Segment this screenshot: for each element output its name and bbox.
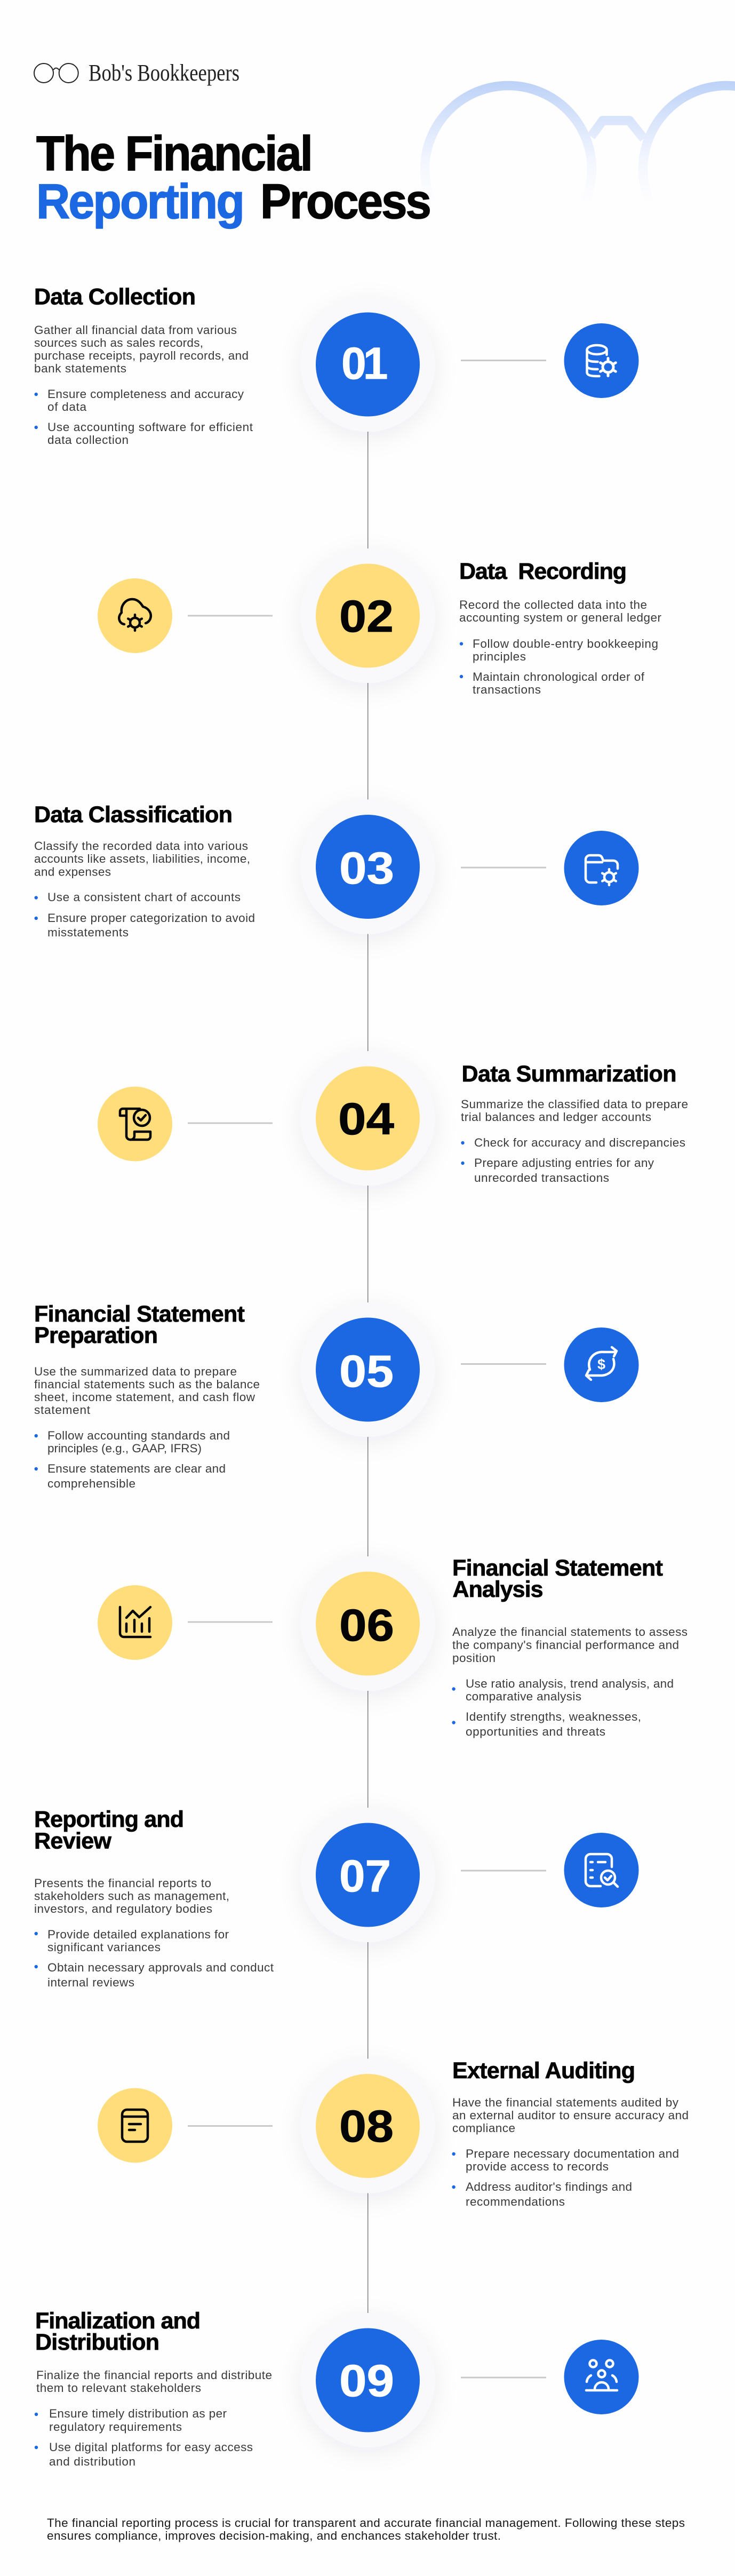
step number badge 04: 04 bbox=[338, 1094, 394, 1144]
heading: Financial Statement bbox=[34, 1301, 245, 1327]
conclusion text bbox=[47, 2516, 685, 2542]
icon: cloud gear bbox=[98, 578, 172, 653]
bullet list bbox=[35, 2407, 253, 2468]
heading: Analysis bbox=[452, 1577, 543, 1602]
description bbox=[36, 2368, 272, 2395]
connector to icon bbox=[188, 1123, 273, 1124]
bullet list: Address auditor's findings and bbox=[466, 2180, 632, 2193]
decorative glasses graphic bbox=[425, 85, 735, 253]
description bbox=[459, 598, 661, 624]
bullet list: comprehensible bbox=[47, 1477, 135, 1490]
panel: step 06 bbox=[98, 1555, 688, 1738]
description: bank statements bbox=[34, 362, 126, 375]
icon: dollar exchange: $ bbox=[597, 1356, 605, 1372]
bullet list: Follow double-entry bookkeeping bbox=[473, 637, 658, 650]
description bbox=[452, 1625, 688, 1665]
bullet list: recommendations bbox=[466, 2195, 565, 2208]
title: The Financial bbox=[36, 126, 311, 181]
icon: line and bar chart bbox=[98, 1585, 172, 1660]
bullet list: unrecorded transactions bbox=[474, 1171, 609, 1184]
bullet list: Provide detailed explanations for bbox=[47, 1928, 229, 1941]
bullet list bbox=[34, 1928, 274, 1989]
description: Finalize the financial reports and distribute bbox=[36, 2368, 272, 2382]
description bbox=[34, 323, 249, 375]
description: financial statements such as the balance bbox=[34, 1378, 260, 1391]
connector to icon bbox=[461, 1363, 546, 1365]
step number badge 05: 05 bbox=[339, 1346, 394, 1396]
heading: Data Collection bbox=[34, 284, 196, 309]
description: statement bbox=[34, 1403, 91, 1417]
description: trial balances and ledger accounts bbox=[461, 1110, 651, 1124]
icon: document search check bbox=[564, 1833, 639, 1907]
title: Reporting bbox=[36, 174, 243, 229]
step number badge 02: 02 bbox=[339, 591, 394, 641]
panel: step 03 bbox=[34, 799, 639, 939]
step number badge 08 bbox=[301, 2058, 435, 2193]
panel: step 07 bbox=[34, 1807, 639, 1989]
bullet list bbox=[460, 637, 658, 696]
icon: people group bbox=[564, 2340, 639, 2414]
timeline connector bbox=[368, 427, 369, 2316]
icon: glasses bbox=[34, 63, 78, 83]
step number badge 01: 01 bbox=[341, 338, 387, 388]
heading: Distribution bbox=[35, 2329, 159, 2355]
step number badge 01 bbox=[301, 297, 435, 432]
description: sheet, income statement, and cash flow bbox=[34, 1390, 255, 1404]
bullet list: Use accounting software for efficient bbox=[47, 420, 253, 434]
bullet list: Ensure completeness and accuracy bbox=[47, 387, 244, 401]
bullet list: regulatory requirements bbox=[49, 2420, 182, 2434]
bullet list: comparative analysis bbox=[466, 1690, 581, 1703]
description: position bbox=[452, 1651, 496, 1665]
description: Presents the financial reports to bbox=[34, 1877, 211, 1890]
step number badge 04 bbox=[301, 1051, 435, 1186]
bullet list: and distribution bbox=[49, 2455, 135, 2468]
description: Analyze the financial statements to assess bbox=[452, 1625, 688, 1639]
description: Record the collected data into the bbox=[459, 598, 647, 611]
step number badge 03: 03 bbox=[339, 843, 394, 893]
heading: Data Summarization bbox=[462, 1061, 676, 1087]
heading bbox=[34, 1807, 184, 1854]
description: stakeholders such as management, bbox=[34, 1889, 229, 1903]
bullet list: Ensure statements are clear and bbox=[47, 1462, 226, 1475]
bullet list: data collection bbox=[47, 433, 129, 447]
heading: Financial Statement bbox=[452, 1555, 663, 1581]
description bbox=[34, 839, 250, 878]
panel: step 01 bbox=[34, 284, 639, 447]
heading bbox=[35, 2308, 201, 2355]
description: and expenses bbox=[34, 865, 111, 878]
bullet list: Use digital platforms for easy access bbox=[49, 2440, 253, 2454]
icon: database gear bbox=[564, 323, 639, 398]
icon: dollar exchange bbox=[564, 1327, 639, 1402]
bullet list: Use a consistent chart of accounts bbox=[47, 891, 241, 904]
step number badge 05 bbox=[301, 1302, 435, 1437]
bullet list: Check for accuracy and discrepancies bbox=[474, 1136, 685, 1149]
bullet list: Ensure proper categorization to avoid bbox=[47, 911, 255, 925]
heading: Reporting and bbox=[34, 1807, 184, 1832]
connector to icon bbox=[188, 2125, 273, 2127]
bullet list bbox=[461, 1136, 685, 1184]
description: sources such as sales records, bbox=[34, 336, 203, 349]
connector to icon bbox=[461, 1870, 546, 1872]
bullet list: Follow accounting standards and bbox=[47, 1429, 230, 1442]
bullet list: transactions bbox=[473, 683, 541, 696]
icon: folder gear bbox=[564, 831, 639, 905]
conclusion text: ensures compliance, improves decision-making, and enchances stakeholder trust. bbox=[47, 2529, 501, 2542]
panel: step 09 bbox=[35, 2308, 638, 2468]
bullet list: Ensure timely distribution as per bbox=[49, 2407, 227, 2420]
step number badge 06 bbox=[301, 1556, 435, 1691]
connector to icon bbox=[461, 866, 546, 869]
step number badge 06: 06 bbox=[339, 1600, 394, 1650]
description: accounts like assets, liabilities, income, bbox=[34, 852, 250, 865]
panel: step 05 bbox=[34, 1301, 639, 1490]
panel: step 04 bbox=[98, 1051, 688, 1186]
description: compliance bbox=[452, 2121, 515, 2135]
brand logo bbox=[34, 60, 239, 86]
description: them to relevant stakeholders bbox=[36, 2381, 201, 2395]
connector to icon bbox=[188, 615, 273, 617]
description bbox=[34, 1877, 229, 1915]
heading bbox=[34, 1301, 245, 1348]
description: investors, and regulatory bodies bbox=[34, 1902, 212, 1915]
panel: step 08 bbox=[98, 2058, 689, 2208]
brand name: Bob's Bookkeepers bbox=[89, 60, 239, 86]
conclusion text: The financial reporting process is crucial for transparent and accurate financial management. Following these steps bbox=[47, 2516, 685, 2530]
bullet list bbox=[34, 891, 255, 939]
bullet list bbox=[452, 1677, 674, 1738]
step number badge 08: 08 bbox=[339, 2101, 394, 2151]
description: purchase receipts, payroll records, and bbox=[34, 349, 249, 362]
bullet list: misstatements bbox=[47, 926, 129, 939]
description: Classify the recorded data into various bbox=[34, 839, 248, 853]
heading: Data Recording bbox=[459, 559, 627, 584]
icon: scroll check bbox=[98, 1086, 172, 1161]
description bbox=[34, 1365, 260, 1417]
heading: Finalization and bbox=[35, 2308, 201, 2334]
title bbox=[36, 126, 430, 229]
step number badge 07 bbox=[301, 1808, 435, 1942]
bullet list: opportunities and threats bbox=[466, 1725, 605, 1738]
bullet list: principles (e.g., GAAP, IFRS) bbox=[47, 1442, 202, 1455]
bullet list: Prepare necessary documentation and bbox=[466, 2147, 679, 2160]
bullet list: internal reviews bbox=[47, 1976, 134, 1989]
heading: Data Classification bbox=[34, 802, 233, 828]
panel: step 02 bbox=[98, 548, 661, 696]
description: Summarize the classified data to prepare bbox=[461, 1098, 688, 1111]
bullet list: Use ratio analysis, trend analysis, and bbox=[466, 1677, 674, 1690]
bullet list: Obtain necessary approvals and conduct bbox=[47, 1961, 274, 1974]
description: the company's financial performance and bbox=[452, 1638, 679, 1652]
step number badge 09 bbox=[301, 2313, 435, 2447]
description: accounting system or general ledger bbox=[459, 611, 661, 624]
connector to icon bbox=[461, 2376, 546, 2379]
bullet list: Maintain chronological order of bbox=[473, 670, 645, 683]
bullet list: of data bbox=[47, 400, 86, 414]
heading: External Auditing bbox=[452, 2058, 635, 2084]
bullet list: Identify strengths, weaknesses, bbox=[466, 1710, 641, 1723]
bullet list bbox=[34, 387, 253, 447]
step number badge 02 bbox=[301, 548, 435, 683]
step number badge 03 bbox=[301, 799, 435, 934]
description: Gather all financial data from various bbox=[34, 323, 237, 337]
description: Have the financial statements audited by bbox=[452, 2096, 679, 2109]
bullet list bbox=[452, 2147, 679, 2208]
description bbox=[461, 1098, 688, 1124]
description: an external auditor to ensure accuracy and bbox=[452, 2109, 689, 2122]
heading: Review bbox=[34, 1828, 112, 1854]
bullet list: Prepare adjusting entries for any bbox=[474, 1156, 654, 1170]
bullet list bbox=[34, 1429, 230, 1490]
icon: document bbox=[98, 2088, 172, 2163]
connector to icon bbox=[188, 1621, 273, 1623]
bullet list: provide access to records bbox=[466, 2160, 609, 2173]
title: Process bbox=[260, 174, 430, 229]
step number badge 09: 09 bbox=[339, 2356, 394, 2406]
heading bbox=[452, 1555, 663, 1602]
step number badge 07: 07 bbox=[339, 1851, 391, 1901]
description: Use the summarized data to prepare bbox=[34, 1365, 237, 1378]
heading: Preparation bbox=[34, 1323, 158, 1348]
bullet list: principles bbox=[473, 650, 526, 663]
connector to icon bbox=[461, 360, 546, 361]
bullet list: significant variances bbox=[47, 1941, 161, 1954]
description bbox=[452, 2096, 689, 2135]
